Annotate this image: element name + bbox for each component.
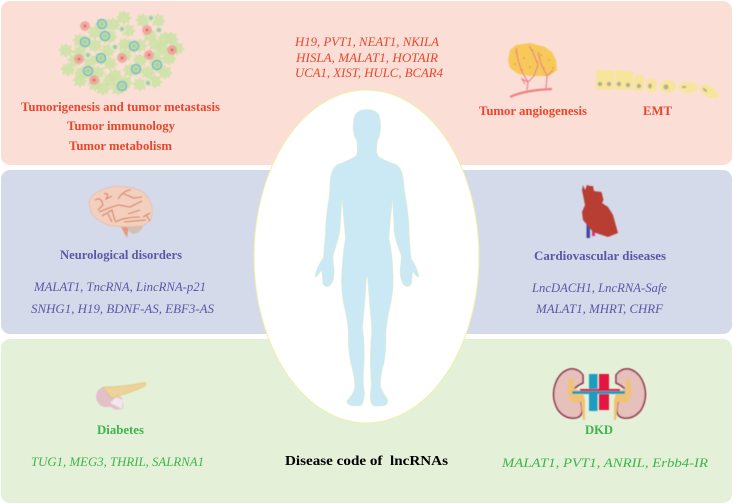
text: tumor lncRNAs: H19, PVT1, NEAT1, NKILA	[294, 34, 439, 49]
caption: disease code: Disease code of lncRNAs	[285, 454, 449, 469]
panel: neurological and cardiovascular	[1, 170, 732, 334]
label: tumor angiogenesis: Tumor angiogenesis	[479, 103, 587, 118]
panel: tumor	[1, 1, 732, 165]
text: tumor lncRNAs: HISLA, MALAT1, HOTAIR	[295, 50, 438, 65]
text: DKD lncRNAs: MALAT1, PVT1, ANRIL, Erbb4-IR	[501, 455, 708, 470]
icon: kidneys	[554, 369, 645, 420]
icon: EMT cells	[596, 70, 719, 98]
text: cardiovascular lncRNAs	[531, 280, 667, 316]
text: diabetes lncRNAs: TUG1, MEG3, THRIL, SALRNA1	[31, 454, 204, 469]
panel: diabetes and DKD	[1, 339, 732, 503]
text: cardiovascular lncRNAs: LncDACH1, LncRNA-Safe	[531, 280, 667, 295]
text: neurological lncRNAs: SNHG1, H19, BDNF-AS, EBF3-AS	[31, 301, 214, 316]
heading: tumor topics	[21, 99, 220, 153]
text: neurological lncRNAs	[31, 279, 214, 316]
icon: brain	[89, 186, 152, 238]
heading: tumor topics: Tumor immunology	[67, 118, 175, 133]
heading: DKD: DKD	[585, 422, 613, 437]
icon: heart	[582, 185, 618, 238]
icon: tumor cell cluster	[58, 10, 185, 96]
text: neurological lncRNAs: MALAT1, TncRNA, LincRNA-p21	[33, 279, 206, 294]
icon: tumor angiogenesis	[508, 43, 557, 97]
text: tumor lncRNAs	[294, 34, 443, 80]
central oval	[254, 90, 479, 423]
heading: tumor topics: Tumor metabolism	[69, 138, 172, 153]
text: tumor lncRNAs: UCA1, XIST, HULC, BCAR4	[295, 65, 443, 80]
text: cardiovascular lncRNAs: MALAT1, MHRT, CHRF	[535, 301, 664, 316]
label: EMT: EMT	[643, 103, 672, 118]
heading: neurological disorders: Neurological disorders	[60, 247, 182, 262]
heading: cardiovascular diseases: Cardiovascular diseases	[534, 248, 666, 263]
heading: tumor topics: Tumorigenesis and tumor metastasis	[21, 99, 220, 114]
human body silhouette	[315, 109, 419, 406]
heading: diabetes: Diabetes	[97, 422, 144, 437]
icon: pancreas	[96, 382, 146, 410]
